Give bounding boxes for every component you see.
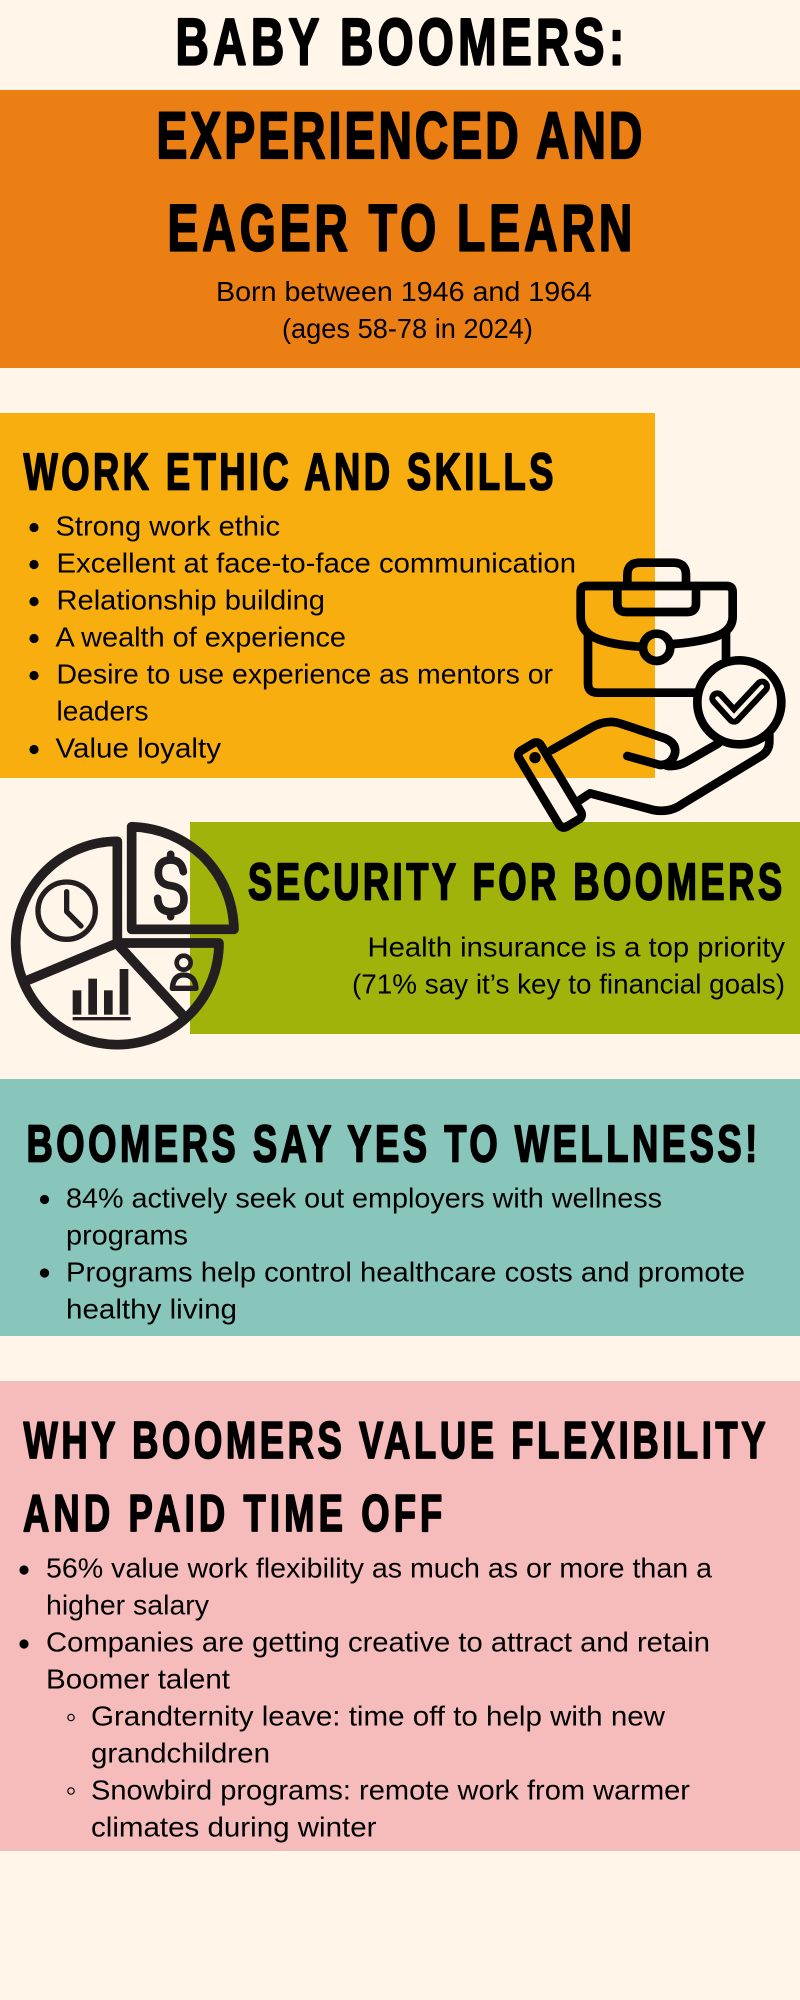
panel background: [0, 1079, 800, 1336]
bullet list: Relationship building: [56, 584, 325, 615]
bullet list: Snowbird programs: remote work from warmer: [91, 1775, 690, 1806]
bullet list: leaders: [56, 695, 148, 726]
heading: WORK ETHIC AND SKILLS: [24, 442, 553, 501]
panel: flexibility and paid time off: [0, 1381, 800, 1851]
bullet list: programs: [66, 1220, 188, 1251]
bullet list: A wealth of experience: [56, 621, 346, 652]
bullet list: 56% value work flexibility as much as or more than a: [46, 1552, 712, 1584]
icon: hand holding briefcase with check: [516, 563, 781, 830]
title: BABY BOOMERS:: [176, 5, 624, 80]
bullet list: higher salary: [46, 1590, 209, 1620]
bullet list: Desire to use experience as mentors or: [56, 658, 553, 689]
health insurance text: Health insurance is a top priority: [368, 932, 785, 963]
bullet list: grandchildren: [91, 1738, 270, 1769]
bullet list: climates during winter: [91, 1812, 376, 1843]
bullet list: Grandternity leave: time off to help with new: [91, 1701, 666, 1732]
banner background: [0, 90, 800, 368]
icon: pie chart with clock, dollar, person and bars: [16, 827, 234, 1045]
heading: BOOMERS SAY YES TO WELLNESS!: [26, 1114, 757, 1173]
bullet list: Boomer talent: [46, 1664, 230, 1694]
heading line: eager to learn: EAGER TO LEARN: [168, 191, 632, 266]
heading: SECURITY FOR BOOMERS: [248, 852, 782, 911]
bullet list: 84% actively seek out employers with wellness: [66, 1183, 662, 1214]
bullet list: Companies are getting creative to attract and retain: [46, 1627, 710, 1658]
heading line: experienced and: EXPERIENCED AND: [156, 99, 642, 173]
bullet list: Excellent at face-to-face communication: [56, 547, 576, 578]
bullet list: healthy living: [66, 1294, 237, 1325]
statistic text: (71% say it’s key to financial goals): [352, 969, 785, 1000]
panel: work ethic and skills: [0, 413, 655, 778]
bullet list: Programs help control healthcare costs and promote: [66, 1257, 745, 1288]
heading line one: WHY BOOMERS VALUE FLEXIBILITY: [24, 1410, 766, 1470]
panel background: [0, 413, 655, 778]
bullet list: [40, 1183, 745, 1325]
ages text: (ages 58-78 in 2024): [282, 313, 533, 344]
bullet list: [19, 1552, 712, 1843]
bullet list: [29, 510, 576, 763]
panel: header banner: [0, 90, 800, 368]
bullet list: Strong work ethic: [56, 510, 280, 541]
panel: wellness: [0, 1079, 800, 1336]
panel background: [0, 1381, 800, 1851]
birth years text: Born between 1946 and 1964: [216, 276, 592, 307]
heading line two: AND PAID TIME OFF: [23, 1483, 442, 1543]
bullet list: Value loyalty: [56, 732, 221, 763]
panel background: [190, 822, 800, 1034]
panel: security for boomers: [190, 822, 800, 1034]
